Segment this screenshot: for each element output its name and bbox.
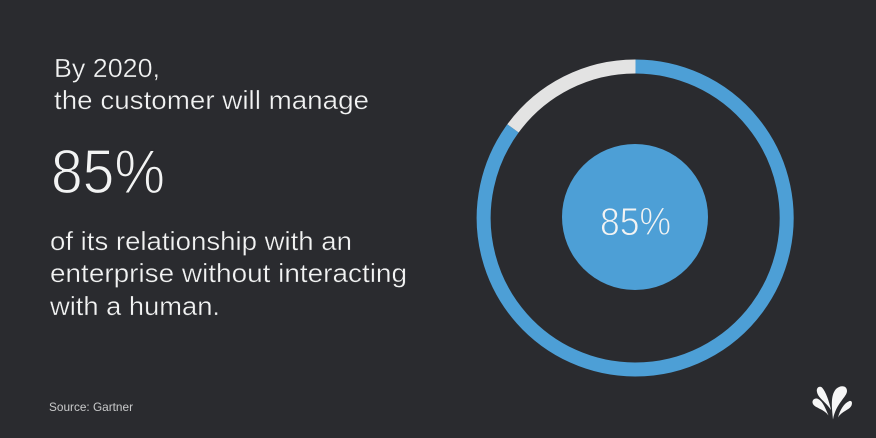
donut blue segment: 85% — [484, 66, 787, 369]
description text block: of its relationship with an — [50, 226, 352, 256]
large statistic: 85%: 85% — [51, 138, 165, 207]
heading text block: the customer will manage — [54, 85, 369, 115]
description text block — [49, 226, 407, 321]
description text block: enterprise without interacting — [50, 258, 407, 288]
description text block: with a human. — [49, 291, 220, 321]
icon: splash logo — [812, 386, 852, 420]
heading text block: By 2020, — [54, 53, 160, 83]
donut gray segment: 15% — [513, 66, 636, 128]
heading text block — [54, 53, 369, 115]
center label: 85%: 85% — [600, 201, 671, 244]
center disc — [562, 144, 708, 290]
source note: Source: Gartner — [49, 400, 133, 414]
donut chart: 85 percent — [484, 66, 787, 369]
